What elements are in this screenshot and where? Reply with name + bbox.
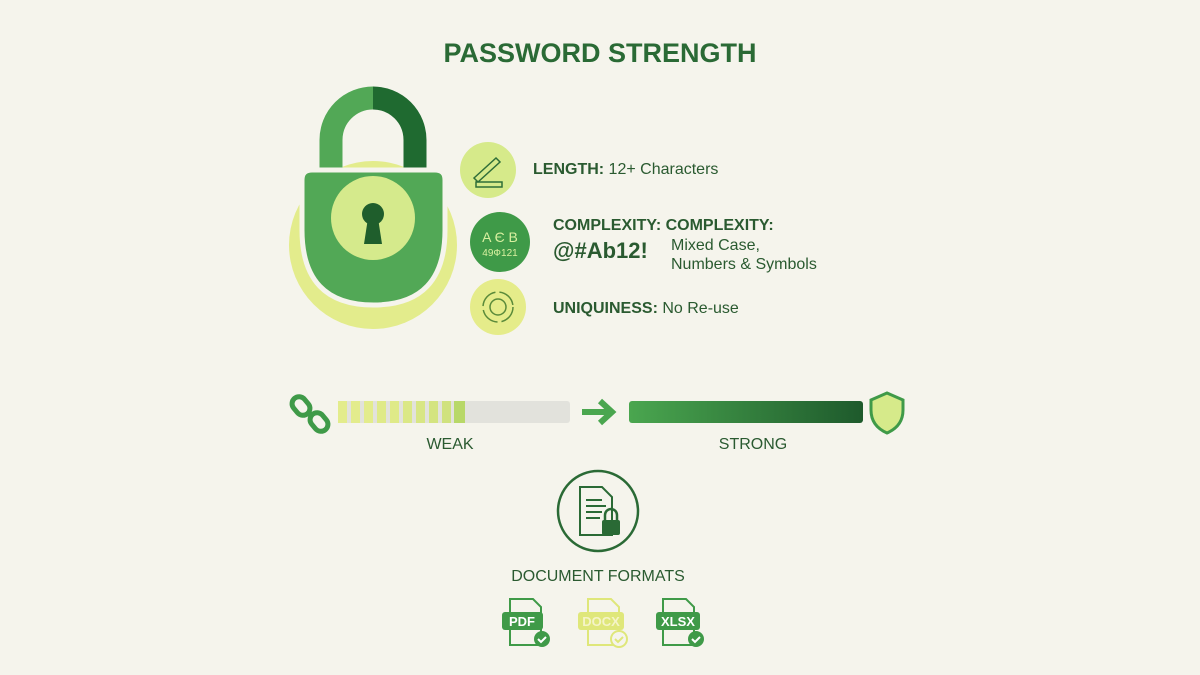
strong bar: [629, 401, 863, 423]
arrow: [582, 401, 612, 423]
icon: docx: DOCX: [582, 614, 620, 629]
icon: broken link: [289, 394, 331, 434]
text: complexity: [553, 217, 817, 273]
text: complexity: Numbers & Symbols: [671, 256, 817, 273]
icon: xlsx: XLSX: [661, 614, 695, 629]
icon: uniqueness: [470, 279, 526, 335]
icon: shield: [871, 393, 903, 433]
icon: characters: A Є B: [482, 229, 518, 245]
padlock: [289, 98, 457, 329]
labels: WEAK: [426, 436, 474, 453]
text: complexity: COMPLEXITY: COMPLEXITY:: [553, 217, 774, 234]
text: complexity: @#Ab12!: [553, 238, 648, 263]
icon: xlsx: [656, 599, 704, 647]
text: length: LENGTH: 12+ Characters: [533, 161, 718, 178]
title: PASSWORD STRENGTH: [443, 38, 757, 68]
icon: characters: 49Ф121: [482, 248, 518, 259]
text: complexity: Mixed Case,: [671, 237, 760, 254]
text: uniqueness: UNIQUINESS: No Re-use: [553, 300, 739, 317]
icon: pdf: [502, 599, 550, 647]
icon: ruler: [460, 142, 516, 198]
icon: document lock: [558, 471, 638, 551]
text: STRONG: [719, 436, 787, 453]
icon: pdf: PDF: [509, 614, 535, 629]
icon: docx: [578, 599, 627, 647]
icon: characters: [470, 212, 530, 272]
weak bar: [338, 401, 570, 423]
text: document formats: DOCUMENT FORMATS: [511, 568, 685, 585]
